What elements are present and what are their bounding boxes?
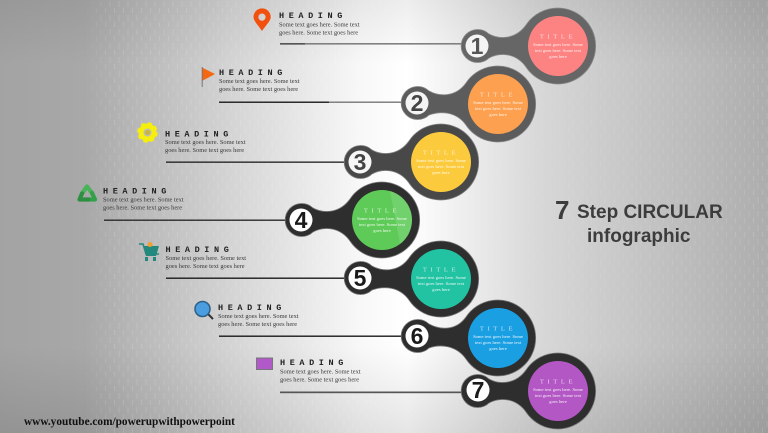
main title: 7 xyxy=(555,195,569,225)
heading 2: HEADING xyxy=(219,68,287,78)
title 5: TITLE xyxy=(423,266,459,274)
node 2 xyxy=(401,66,536,142)
node 4 xyxy=(285,182,420,258)
colour circle 4 xyxy=(352,190,412,250)
number 7: 7 xyxy=(472,377,484,403)
heading 7: HEADING xyxy=(280,358,348,368)
circle text 6: text goes here. Some text xyxy=(475,340,522,345)
connector shape 4 xyxy=(285,182,420,258)
colour circle 2 xyxy=(468,74,528,134)
circle text 3: goes here xyxy=(432,170,450,175)
circle text 7: goes here xyxy=(549,399,567,404)
heading 6: HEADING xyxy=(218,303,286,313)
heading 3: HEADING xyxy=(165,130,233,140)
number badge 5 xyxy=(348,266,372,290)
number 5: 5 xyxy=(354,265,367,291)
circle text 7: Some text goes here. Some xyxy=(533,387,583,392)
title 6: TITLE xyxy=(480,326,516,332)
connector shape 7 xyxy=(461,353,596,429)
description 4: goes here. Some text goes here xyxy=(103,205,182,212)
node 1 xyxy=(461,8,596,84)
description 1: goes here. Some text goes here xyxy=(279,30,358,37)
colour circle 7 xyxy=(528,361,588,421)
circle text 7: text goes here. Some text xyxy=(535,393,582,398)
title 3: TITLE xyxy=(423,150,459,156)
leader line 1 xyxy=(280,43,462,45)
number badge 4 xyxy=(290,208,312,232)
heading 5: HEADING xyxy=(166,245,233,255)
step 1 xyxy=(254,8,596,84)
number 6: 6 xyxy=(411,323,423,349)
title 7: TITLE xyxy=(540,378,576,386)
description 5: goes here. Some text goes here xyxy=(166,263,245,270)
title 4: TITLE xyxy=(364,208,400,214)
circle text 1: goes here xyxy=(549,54,567,59)
main title: infographic xyxy=(587,226,691,247)
step 7 xyxy=(256,353,596,429)
number badge 6 xyxy=(406,324,428,348)
connector shape 3 xyxy=(344,124,479,200)
icon: location pin xyxy=(254,8,271,31)
step 4 xyxy=(80,182,420,258)
node 5 xyxy=(344,241,479,317)
number badge 3 xyxy=(348,150,372,174)
icon: gear xyxy=(138,124,156,142)
number badge 1 xyxy=(466,34,488,58)
step 3 xyxy=(138,124,479,200)
number badge 7 xyxy=(466,378,490,402)
number 4: 4 xyxy=(295,207,308,233)
circle text 1: Some text goes here. Some xyxy=(533,42,583,47)
circle text 5: goes here xyxy=(432,287,450,292)
leader line 6 xyxy=(219,336,403,337)
connector shape 6 xyxy=(401,300,536,376)
heading 1: HEADING xyxy=(279,11,347,21)
icon: purple rectangle xyxy=(256,358,272,370)
circle text 2: goes here xyxy=(489,112,507,117)
circle text 5: text goes here. Some text xyxy=(418,281,465,286)
step 2 xyxy=(202,66,536,142)
description 5: Some text goes here. Some text xyxy=(166,255,246,262)
node 6 xyxy=(401,300,536,376)
circle text 4: Some text goes here. Some xyxy=(357,216,407,221)
connector shape 1 xyxy=(461,8,596,84)
icon: flag xyxy=(202,67,215,87)
circle text 4: goes here xyxy=(373,228,391,233)
number 1: 1 xyxy=(471,33,484,59)
circle text 2: Some text goes here. Some xyxy=(473,100,523,105)
description 4: Some text goes here. Some text xyxy=(103,196,184,204)
number 3: 3 xyxy=(354,149,366,175)
description 6: goes here. Some text goes here xyxy=(218,321,297,328)
description 7: Some text goes here. Some text xyxy=(280,368,361,376)
circle text 5: Some text goes here. Some xyxy=(416,275,466,280)
description 1: Some text goes here. Some text xyxy=(279,22,360,28)
step 6 xyxy=(195,300,536,376)
colour circle 3 xyxy=(411,132,471,192)
circle text 1: text goes here. Some text xyxy=(535,48,582,53)
circle text 6: Some text goes here. Some xyxy=(473,334,523,339)
circle text 6: goes here xyxy=(489,346,507,351)
description 3: goes here. Some text goes here xyxy=(165,147,244,154)
circle text 3: text goes here. Some text xyxy=(418,164,465,169)
circle text 2: text goes here. Some text xyxy=(475,106,522,111)
description 7: goes here. Some text goes here xyxy=(280,377,359,384)
colour circle 1 xyxy=(528,16,588,76)
connector shape 5 xyxy=(344,241,479,317)
website url: www.youtube.com/powerupwithpowerpoint xyxy=(24,416,235,428)
leader line 3 xyxy=(166,162,346,163)
number 2: 2 xyxy=(411,90,423,116)
leader line 2 xyxy=(219,102,403,103)
description 2: Some text goes here. Some text xyxy=(219,78,300,85)
title 2: TITLE xyxy=(480,92,516,98)
colour circle 6 xyxy=(468,308,528,368)
leader line 7 xyxy=(280,392,463,393)
icon: recycle xyxy=(80,186,95,200)
main title: Step CIRCULAR xyxy=(577,202,723,223)
node 7 xyxy=(461,353,596,429)
main title xyxy=(555,195,723,247)
title 1: TITLE xyxy=(540,34,576,40)
node 3 xyxy=(344,124,479,200)
step 5 xyxy=(139,241,479,317)
icon: shopping cart xyxy=(139,242,159,261)
circle text 3: Some text goes here. Some xyxy=(416,158,466,163)
description 2: goes here. Some text goes here xyxy=(219,86,298,93)
heading 4: HEADING xyxy=(103,186,171,196)
description 3: Some text goes here. Some text xyxy=(165,139,246,146)
number badge 2 xyxy=(406,92,428,114)
circle text 4: text goes here. Some text xyxy=(359,222,406,227)
connector shape 2 xyxy=(401,66,536,142)
colour circle 5 xyxy=(411,249,471,309)
icon: magnifier xyxy=(195,302,213,319)
description 6: Some text goes here. Some text xyxy=(218,313,299,320)
leader line 5 xyxy=(166,278,346,279)
leader line 4 xyxy=(104,220,288,221)
